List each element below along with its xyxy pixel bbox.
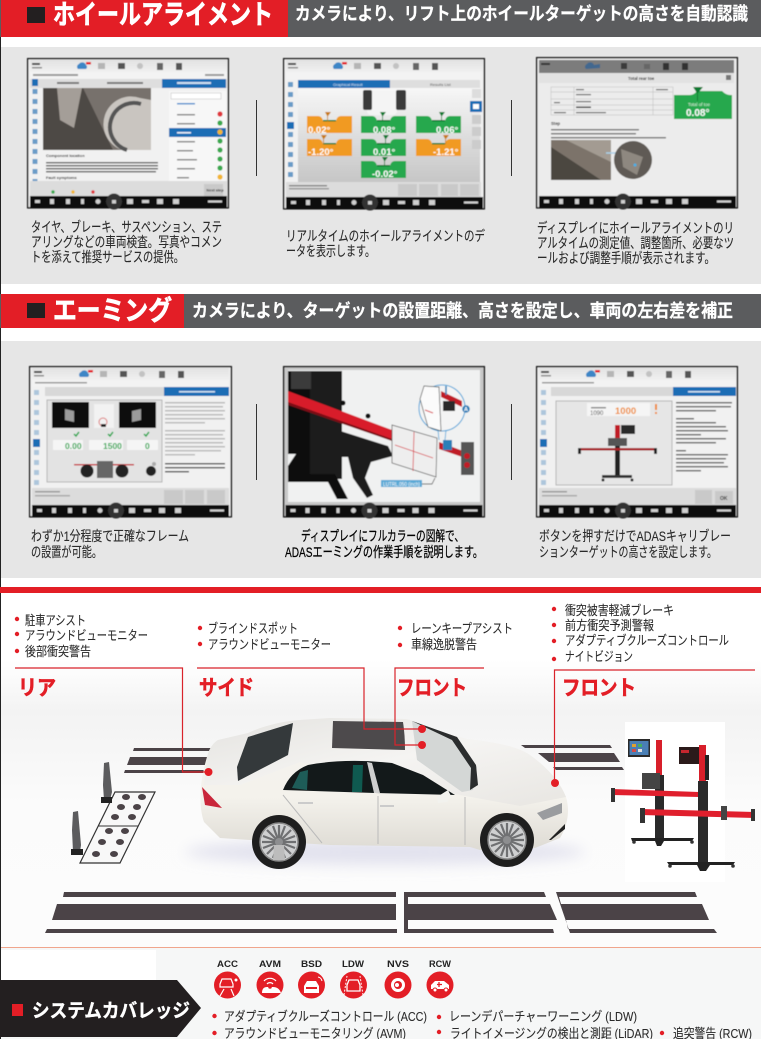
text: inspection: アリングなどの車両検査。写真やコメン — [31, 234, 222, 250]
dimension label — [381, 478, 435, 488]
dimension label: LUTRL.050 (inch) — [383, 482, 420, 488]
feature list: front collision: 衝突被害軽減ブレーキ — [565, 603, 674, 618]
screen: chassis inspection: Fault symptoms — [46, 175, 77, 180]
feature list: rear: 後部衝突警告 — [25, 644, 91, 659]
text: realtime data: ータを表示します。 — [286, 243, 375, 259]
divider — [256, 404, 257, 480]
panel: ADAS car diagram — [1, 603, 761, 947]
coverage list: アダプティブクルーズコントロール (ACC) — [224, 1009, 427, 1024]
reflector stand 2 — [71, 811, 83, 855]
screen: total rear toe — [537, 58, 737, 210]
badge A — [462, 405, 470, 413]
screen: frame height: OK — [720, 496, 728, 502]
alignment cards: 0.01° — [373, 147, 395, 158]
inspection photo — [43, 88, 151, 150]
text: display — [537, 220, 734, 266]
label: front: フロント — [397, 677, 467, 700]
text: full colour diagram: ADASエーミングの作業手順を説明します。 — [285, 544, 483, 560]
target board: dots — [80, 792, 155, 863]
label: rear: リア — [18, 677, 56, 700]
reflector stand 1 — [101, 762, 112, 803]
feature list: rear — [15, 613, 148, 659]
icon: AVM: AVM — [259, 959, 281, 970]
taillight — [202, 787, 222, 808]
divider — [511, 404, 512, 480]
feature list: front collision: ナイトビジョン — [565, 649, 633, 664]
text: one minute placement: わずか1分程度で正確なフレーム — [31, 528, 189, 544]
icon: header square — [27, 303, 45, 318]
panel: aiming — [1, 341, 761, 578]
coverage list: レーンデパーチャーワーニング (LDW) — [449, 1009, 637, 1024]
calibration box: 0.00 — [65, 441, 82, 451]
calibration box: 0 — [145, 441, 150, 451]
photos — [551, 140, 652, 180]
text: inspection: トを添えて推奨サービスの提供。 — [31, 249, 184, 265]
label: front 2: フロント — [562, 677, 636, 700]
icon: header square — [27, 7, 45, 23]
sunroof — [332, 721, 405, 750]
alignment cards: 0.02° — [308, 125, 330, 136]
screen: total rear toe: Total rear toe — [628, 76, 655, 81]
icon: LDW — [340, 959, 367, 998]
wheels top view — [363, 90, 406, 115]
icon: NVS: NVS — [387, 959, 409, 970]
alignment cards — [307, 112, 461, 180]
height box: 1000 — [615, 406, 636, 417]
floor mat: long — [45, 892, 717, 933]
connector: side — [197, 668, 426, 733]
icon: ACC: ACC — [217, 959, 238, 970]
feature list: front lane: レーンキープアシスト — [411, 621, 513, 636]
badge A: A — [464, 407, 468, 413]
feature list: side: ブラインドスポット — [208, 621, 298, 636]
icon: NVS — [384, 959, 412, 998]
alignment cards: 0.06° — [436, 125, 458, 136]
icon: BSD — [298, 959, 325, 998]
connector: front — [395, 668, 484, 749]
section header: wheel alignment — [0, 0, 761, 37]
section header: aiming — [0, 294, 761, 328]
label: side: サイド — [199, 677, 254, 700]
feature list: front collision: 前方衝突予測警報 — [565, 618, 654, 633]
text: inspection: タイヤ、ブレーキ、サスペンション、ステ — [31, 219, 222, 235]
banner: system coverage — [0, 980, 201, 1037]
height box: 1090 — [590, 411, 604, 417]
alignment cards: -1.21° — [433, 147, 459, 158]
feature list: side — [198, 621, 331, 652]
screen: aiming illustration — [284, 367, 484, 518]
inspection list — [169, 91, 226, 181]
feature list: front collision — [552, 603, 729, 664]
side windows — [283, 761, 455, 795]
text: one minute placement: の設置が可能。 — [31, 544, 102, 560]
screen: frame height — [537, 367, 737, 518]
toe gauge card — [674, 87, 732, 119]
feature list: side: アラウンドビューモニター — [208, 637, 331, 652]
text: full colour diagram: ディスプレイにフルカラーの図解で、 — [301, 528, 464, 544]
calibration box — [47, 400, 162, 482]
alignment cards: -0.02° — [372, 169, 398, 180]
door lines — [283, 795, 465, 845]
mode buttons — [470, 89, 482, 149]
icon: ACC — [214, 959, 241, 998]
banner: system coverage: システムカバレッジ — [32, 1000, 190, 1022]
coverage list — [212, 1009, 752, 1039]
text: inspection — [31, 219, 222, 265]
windshield — [412, 721, 477, 792]
callout magnifier — [419, 385, 465, 440]
screen: chassis inspection: Next step — [206, 188, 224, 192]
connector: rear — [15, 668, 212, 776]
feature list: front lane — [398, 621, 513, 652]
text: full colour diagram — [285, 528, 483, 560]
heading: wheel alignment: ホイールアライメント — [53, 0, 273, 30]
calibration frame — [578, 425, 657, 482]
lower grille — [549, 824, 565, 840]
floor mat: front — [521, 745, 624, 770]
mirror — [437, 790, 451, 803]
toe gauge card: 0.08° — [686, 108, 709, 119]
wheel: rear — [252, 815, 306, 869]
alignment cards: -1.20° — [308, 147, 334, 158]
red divider — [0, 587, 761, 593]
car — [185, 718, 585, 869]
divider — [256, 100, 257, 176]
ADAS calibration stand: front unit — [640, 745, 755, 871]
panel: wheel alignment — [1, 47, 761, 284]
target board — [392, 425, 437, 477]
alignment cards: 0.08° — [373, 125, 395, 136]
icon: BSD: BSD — [301, 959, 322, 970]
screen: graphical result: Graphical Result — [333, 82, 363, 87]
headlight — [537, 803, 562, 820]
panel: system coverage — [0, 947, 761, 1039]
screen: total rear toe: Step — [551, 121, 561, 126]
feature list: rear: アラウンドビューモニター — [25, 628, 148, 643]
icon: RCW: RCW — [429, 959, 451, 970]
toe gauge card: Total of toe — [688, 102, 711, 107]
screen: graphical result: Results List — [430, 82, 452, 87]
feature list: front lane: 車線逸脱警告 — [411, 637, 477, 652]
calibration box: 1500 — [103, 441, 122, 451]
wheel: front — [480, 813, 534, 867]
feature list: rear: 駐車アシスト — [25, 613, 86, 628]
height box — [556, 401, 672, 485]
icon: RCW — [426, 959, 454, 998]
screen: chassis inspection — [28, 59, 228, 210]
screen: chassis inspection: Component location — [46, 153, 85, 158]
rear window — [237, 723, 293, 781]
calibration frame stand — [288, 371, 393, 499]
text: realtime data — [286, 228, 485, 259]
icon: LDW: LDW — [342, 959, 364, 970]
heading: aiming: エーミング — [53, 295, 172, 326]
text: one minute placement — [31, 528, 189, 560]
divider — [511, 100, 512, 176]
screen: graphical result — [284, 59, 484, 210]
connector: front 2 — [551, 670, 755, 787]
icon: AVM — [256, 959, 284, 998]
floor mat: rear — [124, 748, 214, 773]
text: realtime data: リアルタイムのホイールアライメントのデ — [286, 228, 485, 244]
ADAS calibration stand: rear unit — [611, 739, 699, 846]
text: height setting — [539, 528, 731, 560]
screen: frame placement — [30, 367, 231, 518]
